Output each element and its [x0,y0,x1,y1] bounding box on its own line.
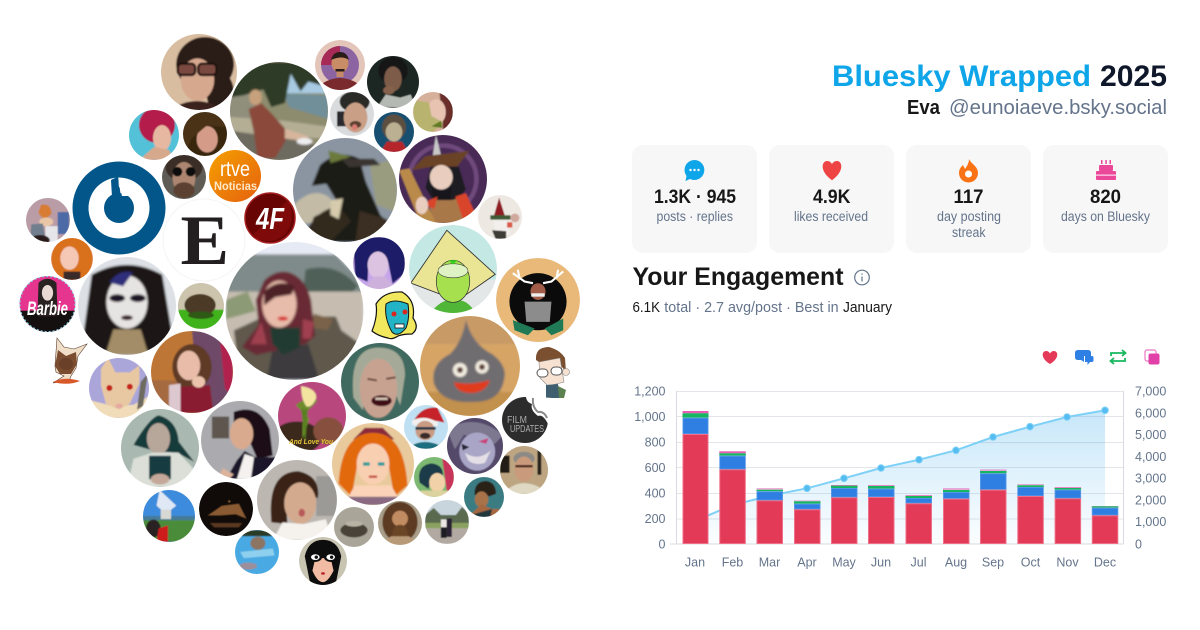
bars: quotes [682,411,1118,506]
avatar: deer illustration [496,258,580,342]
month labels: Dec [1094,556,1116,570]
left axis labels: 0 [659,538,666,552]
panel: likes received: likes received [794,209,868,224]
month labels: Jun [871,556,891,570]
engagement summary: total · 2.7 avg/post · Best in [664,300,839,316]
month labels: May [832,556,857,570]
avatar: woman painting teal [464,477,504,517]
avatar: couple in garden [425,500,469,544]
avatar: Peridot [409,225,497,315]
avatar: Barbie: Barbie [27,299,68,320]
avatar: rtve Noticias logo: rtve [220,158,250,181]
line points [804,407,1108,492]
left axis labels [634,384,666,552]
avatar: man with sunglasses [162,155,206,199]
icon: chat bubble [685,160,704,181]
avatar: older man with glasses [500,446,548,494]
avatar: long-haired man [257,460,337,540]
avatar: ginger woman [51,238,93,280]
avatar: woman with glasses [161,34,237,110]
left axis labels: 1,200 [634,384,666,398]
avatar: nerd cartoon [536,347,570,398]
icon: reposts arrows [1110,350,1126,364]
bars: reposts [682,413,1118,508]
left axis labels: 800 [645,436,666,450]
avatar: cartoon man on purple [315,40,365,90]
avatar: rtve Noticias logo [209,150,261,202]
engagement summary: 6.1K [632,300,660,316]
month labels: Apr [797,556,817,570]
avatar: man in dark [367,56,419,108]
icon: quotes copies [1145,350,1160,364]
bars: replies [683,418,1118,515]
avatar: Film Updates logo [502,396,552,443]
avatar: siamese cat sticker [53,338,87,384]
panel: day posting streak: 117 [954,187,984,208]
panel: days on Bluesky [1043,145,1168,253]
panel: day posting streak: day posting [937,209,1001,224]
right axis labels: 1,000 [1135,515,1166,529]
avatar: white rat illustration [89,358,149,418]
avatar: bearded man [378,501,422,545]
left axis labels: 600 [645,461,666,475]
panel: posts and replies: 1.3K · 945 [654,187,736,208]
month labels: Aug [945,556,967,570]
avatar: Film Updates logo: UPDATES [510,424,544,435]
icon: likes heart [1043,351,1057,364]
avatar: vampire woman [341,343,419,421]
left axis labels: 1,000 [634,410,666,424]
avatar: grey smiling face [447,418,503,474]
right axis labels: 2,000 [1135,494,1166,508]
avatar: slime figure [420,316,520,416]
panel: days on Bluesky: days on Bluesky [1061,209,1150,224]
avatar: pale face with leaves [413,92,453,132]
combined bar and line chart [634,384,1166,570]
panel: likes received: 4.9K [813,187,851,208]
avatar: calla lily: And Love You [288,437,333,446]
avatar: man with tongue out [330,92,374,136]
right axis labels: 7,000 [1135,384,1166,398]
avatar: bard illustration [399,135,487,223]
avatar: brown-haired woman [183,112,227,156]
icon: birthday cake [1096,160,1116,180]
avatar: goth woman [78,257,176,355]
right axis labels: 4,000 [1135,450,1166,464]
avatar: goat painting [293,138,397,242]
avatar: E logo: E [180,202,229,280]
icon: replies bubbles [1075,350,1094,365]
avatar: 4F logo: 4F [255,201,285,236]
avatar: woman in red top [151,331,233,413]
avatar: medieval painting face [374,112,414,152]
avatar: Barbie [20,276,76,333]
title: 2025 [1100,60,1167,93]
month labels: Jul [911,556,926,570]
avatar: castle landscape [140,487,198,545]
avatar: calla lily [278,382,346,450]
avatar: woman with bob hair [197,397,283,483]
month labels: Mar [759,556,780,570]
avatar: woman with book [121,409,199,487]
avatar: blue-haired illustration [353,237,405,289]
panel: posts and replies [632,145,757,253]
avatar: dark night landscape [199,482,253,536]
user name and handle: Eva [907,97,941,119]
avatar: bird on green [178,283,224,329]
legend icons [1043,350,1160,365]
panel: posts and replies: posts · replies [656,209,733,224]
avatar: red-haired woman [129,110,179,160]
month labels: Nov [1056,556,1079,570]
panel: likes received [769,145,894,253]
engagement summary: January [843,300,893,316]
month labels: Feb [722,556,743,570]
avatar: man with Santa hat [404,405,448,449]
user name and handle: @eunoiaeve.bsky.social [949,97,1167,119]
right axis labels: 6,000 [1135,406,1166,420]
right axis labels: 0 [1135,538,1142,552]
cumulative area [695,410,1105,544]
title: Bluesky Wrapped [832,60,1091,93]
panel: day posting streak: streak [952,225,986,240]
avatar: Film Updates logo: FILM [507,415,527,426]
avatar: woman sitting in landscape [230,62,328,160]
month labels: Oct [1021,556,1041,570]
month labels: Jan [685,556,705,570]
left axis labels: 200 [645,512,666,526]
avatar: rtve Noticias logo: Noticias [214,179,257,193]
avatar: man in pool [233,528,281,576]
avatar: zombie comic sticker [372,292,416,339]
avatar: pixel-art redhead [332,423,414,505]
avatar: hooded cartoon [299,537,347,585]
icon: heart [823,161,841,180]
avatar: gnome [478,195,522,239]
avatar: green-haired anime [414,457,454,497]
left axis labels: 400 [645,486,666,500]
engagement summary [632,300,893,316]
avatar: 4F logo [245,193,295,243]
icon: flame [959,159,978,182]
avatar cloud [20,30,580,585]
bars: likes [683,434,1118,544]
avatar: Eva main portrait [226,242,364,380]
month labels: Sep [982,556,1004,570]
month labels [685,556,1116,570]
icon: info [855,270,869,285]
avatar: rock texture [334,507,374,547]
panel: days on Bluesky: 820 [1090,187,1121,208]
avatar: E logo [163,199,245,281]
right axis labels [1135,384,1166,552]
heading: Your Engagement: Your Engagement [632,263,844,291]
panel: day posting streak [906,145,1031,253]
avatar: blue ring logo [72,162,166,254]
right axis labels: 3,000 [1135,472,1166,486]
right axis labels: 5,000 [1135,428,1166,442]
avatar: cartoon on pink [26,198,70,242]
cumulative line [695,410,1105,521]
